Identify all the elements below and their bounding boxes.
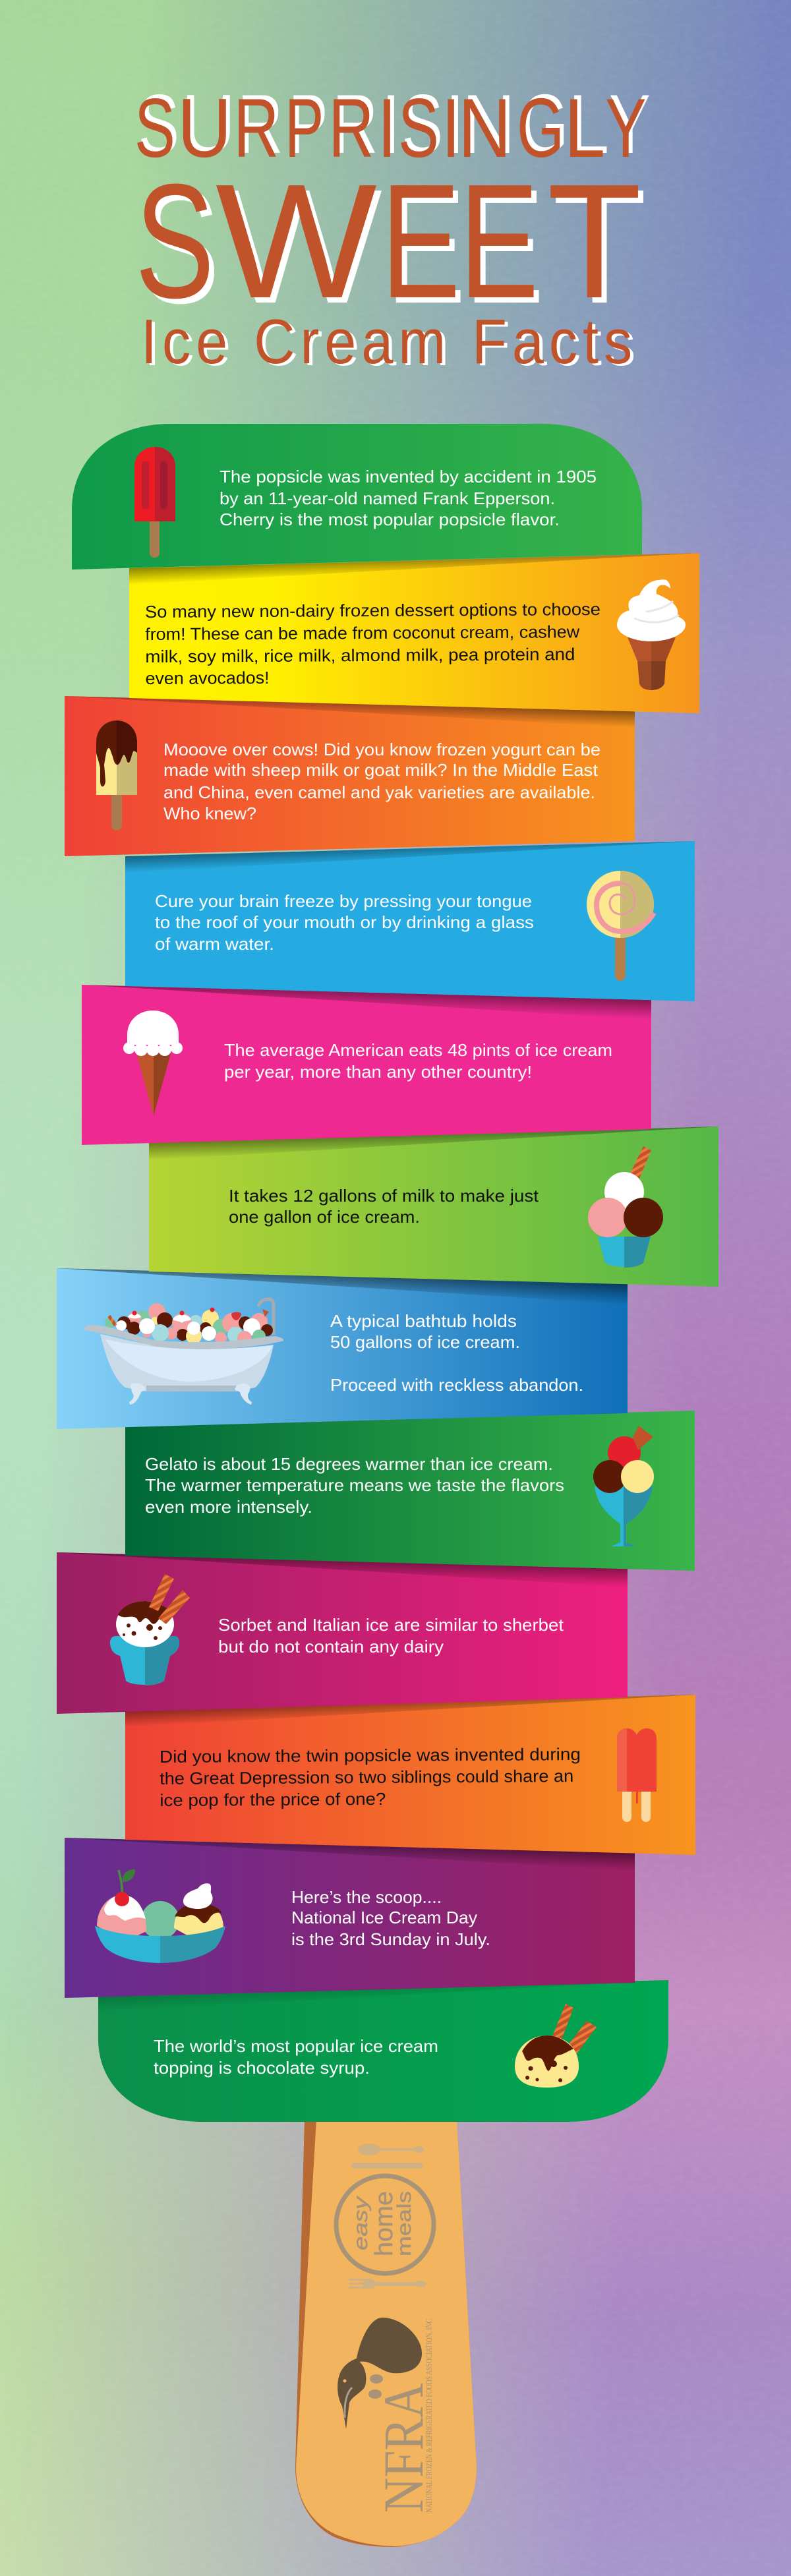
icon: cup with scoop and wafers xyxy=(110,1574,190,1685)
panel 7: bathtub xyxy=(57,1268,628,1429)
text: scoop date: National Ice Cream Day xyxy=(291,1908,477,1927)
popsicle stick with sponsor logos xyxy=(295,2119,477,2547)
panel 9: sorbet and Italian ice xyxy=(57,1552,628,1714)
logo: easy home meals xyxy=(336,2144,434,2289)
title line: Sweet: S xyxy=(135,150,214,332)
title line: Surprisingly: I xyxy=(378,82,396,175)
text: non-dairy fact: even avocados! xyxy=(145,668,270,688)
title line: Sweet: T xyxy=(547,151,641,332)
tub body xyxy=(100,1334,274,1391)
icon: three-scoop cup xyxy=(588,1146,663,1268)
icon: spoon xyxy=(358,2144,424,2155)
title line: Surprisingly: N xyxy=(458,82,512,175)
panel 3: frozen yogurt xyxy=(65,696,635,856)
text: yogurt fact xyxy=(163,740,601,823)
text: sorbet fact xyxy=(218,1615,564,1656)
text: bathtub fact: A typical bathtub holds xyxy=(330,1311,517,1331)
text: twin popsicle fact: Did you know the twin popsicle was invented during xyxy=(160,1744,581,1767)
title line: Sweet: E xyxy=(459,150,539,332)
text: topping fact xyxy=(154,2036,438,2078)
title line: Surprisingly: R xyxy=(233,81,279,175)
title line: Ice Cream Facts: Ice Cream Facts xyxy=(141,307,632,377)
text: gelato fact: Gelato is about 15 degrees warmer than ice cream. xyxy=(145,1454,553,1474)
text: pints fact: The average American eats 48 pints of ice cream xyxy=(224,1040,612,1060)
title line: Surprisingly: P xyxy=(285,82,324,175)
text: milk fact: one gallon of ice cream. xyxy=(229,1207,420,1227)
icon: bathtub full of ice cream xyxy=(84,1299,283,1405)
text: bathtub fact: 50 gallons of ice cream. xyxy=(330,1332,520,1352)
text: twin popsicle fact: the Great Depression so two siblings could share an xyxy=(160,1766,573,1788)
text: scoop date: Here’s the scoop.... xyxy=(291,1887,442,1907)
title line: Surprisingly: U xyxy=(177,81,232,175)
icon: fork xyxy=(349,2279,426,2289)
title line: Surprisingly: G xyxy=(517,81,564,175)
text: twin popsicle fact: ice pop for the price of one? xyxy=(160,1789,386,1810)
text: yogurt fact: Mooove over cows! Did you know frozen yogurt can be xyxy=(163,740,601,759)
text: non-dairy fact: So many new non-dairy frozen dessert options to choose xyxy=(145,599,601,622)
text: sorbet fact: Sorbet and Italian ice are similar to sherbet xyxy=(218,1615,564,1635)
text: gelato fact xyxy=(145,1454,564,1517)
text: brain freeze fact xyxy=(155,891,534,954)
panel 11: national ice cream day xyxy=(65,1838,635,1998)
text: gelato fact: The warmer temperature means we taste the flavors xyxy=(145,1475,564,1495)
text: scoop date xyxy=(291,1887,490,1949)
icon: single scoop cone xyxy=(123,1010,183,1116)
logo: easy home meals: easy xyxy=(350,2195,372,2250)
icon: chocolate dipped popsicle xyxy=(96,720,137,831)
icon: soft serve cone xyxy=(617,579,686,690)
text: scoop date: is the 3rd Sunday in July. xyxy=(291,1929,490,1949)
logo: NFRA kiwi bird: NATIONAL FROZEN & REFRIGERATED FOODS ASSOCIATION, INC xyxy=(424,2319,434,2513)
icon: red popsicle xyxy=(134,447,175,558)
text: brain freeze fact: of warm water. xyxy=(155,934,274,954)
panel 6: gallons of milk xyxy=(149,1127,718,1287)
title line: Surprisingly: I xyxy=(442,82,460,175)
scoops pile xyxy=(105,1303,273,1345)
icon: lollipop xyxy=(587,871,654,981)
text: topping fact: The world’s most popular ice cream xyxy=(154,2036,438,2056)
text: non-dairy fact xyxy=(145,599,601,688)
panel 4: brain freeze xyxy=(125,841,695,1001)
icon: banana split bowl xyxy=(95,1869,225,1963)
text: sorbet fact: but do not contain any dairy xyxy=(218,1637,444,1656)
text: non-dairy fact: from! These can be made from coconut cream, cashew xyxy=(145,622,579,644)
icon: knife xyxy=(351,2163,423,2169)
panel 12: chocolate syrup xyxy=(98,1980,668,2122)
text: yogurt fact: Who knew? xyxy=(163,804,256,823)
text: pints fact: per year, more than any other country! xyxy=(224,1062,532,1082)
panel 1: popsicle invention xyxy=(72,424,642,570)
title line: Surprisingly: L xyxy=(564,82,605,175)
text: popsicle fact: Cherry is the most popular popsicle flavor. xyxy=(220,510,560,529)
title line: Surprisingly: R xyxy=(328,81,374,175)
text: bathtub fact: Proceed with reckless abandon. xyxy=(330,1375,583,1395)
text: pints fact xyxy=(224,1040,612,1082)
title line: Surprisingly: S xyxy=(398,81,439,175)
icon: twin popsicle xyxy=(617,1728,657,1822)
title line: Surprisingly xyxy=(134,81,647,175)
text: milk fact: It takes 12 gallons of milk to make just xyxy=(229,1186,539,1206)
text: popsicle fact: The popsicle was invented by accident in 1905 xyxy=(220,467,597,486)
tub rim xyxy=(84,1325,283,1349)
text: yogurt fact: and China, even camel and yak varieties are available. xyxy=(163,782,595,802)
title line: Surprisingly: S xyxy=(134,81,175,175)
panel 2: non-dairy options xyxy=(129,553,699,713)
text: twin popsicle fact xyxy=(160,1744,581,1810)
text: milk fact xyxy=(229,1186,539,1227)
text: topping fact: topping is chocolate syrup. xyxy=(154,2058,370,2078)
title xyxy=(134,81,647,377)
text: yogurt fact: made with sheep milk or goat milk? In the Middle East xyxy=(163,760,599,780)
text: popsicle fact xyxy=(220,467,597,529)
tub feet xyxy=(129,1383,252,1405)
text: popsicle fact: by an 11-year-old named Frank Epperson. xyxy=(220,488,555,508)
title line: Sweet xyxy=(135,150,641,332)
logo: easy home meals: meals xyxy=(394,2191,415,2256)
logo: NFRA kiwi bird xyxy=(337,2318,435,2513)
title line: Surprisingly: Y xyxy=(605,81,647,175)
text: brain freeze fact: to the roof of your mouth or by drinking a glass xyxy=(155,912,534,932)
text: non-dairy fact: milk, soy milk, rice milk, almond milk, pea protein and xyxy=(145,644,575,666)
title line: Sweet: E xyxy=(381,150,460,332)
panel 5: pints per year xyxy=(82,985,651,1145)
icon: gelato glass xyxy=(593,1426,654,1546)
panel 8: gelato xyxy=(125,1411,695,1571)
text: gelato fact: even more intensely. xyxy=(145,1497,312,1517)
logo: NFRA kiwi bird: NFRA xyxy=(372,2383,435,2513)
text: bathtub fact xyxy=(330,1311,583,1395)
text: brain freeze fact: Cure your brain freeze by pressing your tongue xyxy=(155,891,532,911)
panel 10: twin popsicle xyxy=(125,1695,695,1855)
title line: Sweet: W xyxy=(216,150,377,332)
logo: easy home meals: home xyxy=(370,2191,398,2256)
icon: scoop with syrup and wafers xyxy=(515,2004,597,2088)
faucet xyxy=(258,1299,274,1335)
